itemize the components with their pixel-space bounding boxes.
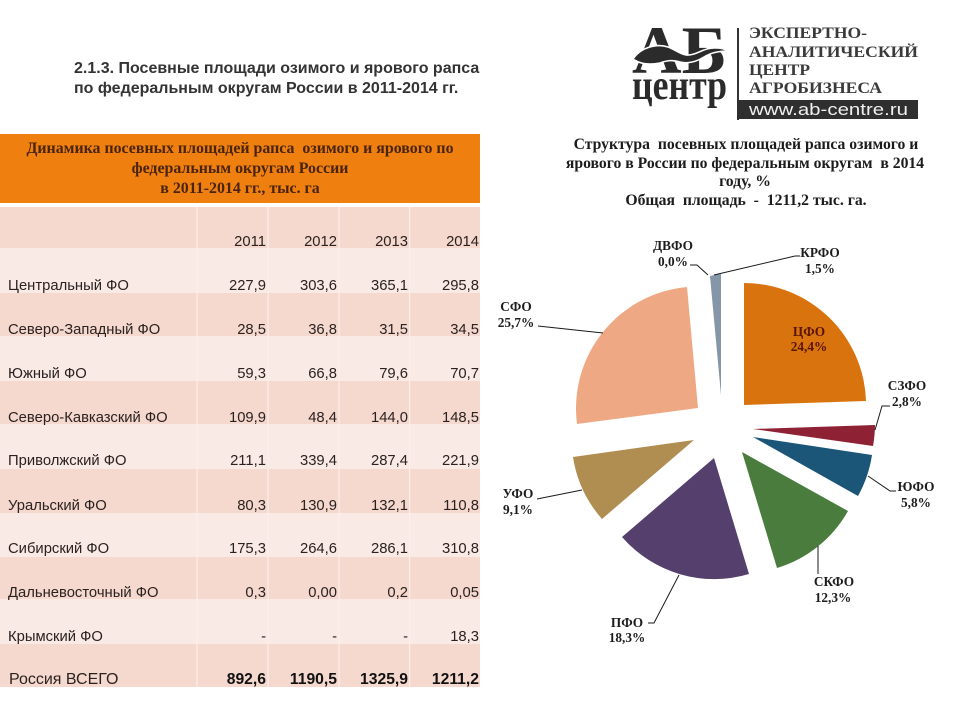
label: СЗФО: СЗФО [888,378,926,393]
label: ЦФО: 24,4% [791,339,827,354]
row: Приволжский ФО: 211,1 [230,453,266,469]
row: Крымский ФО: - [261,629,266,645]
row: Приволжский ФО: Приволжский ФО [8,453,127,469]
row: Россия ВСЕГО: 1325,9 [360,671,408,688]
label: ДВФО: ДВФО [653,238,693,253]
label: ЮФО [868,476,934,510]
row: Уральский ФО: 80,3 [237,498,266,514]
row: Северо-Кавказский ФО: 48,4 [308,410,337,426]
row: Россия ВСЕГО: 1211,2 [432,671,479,688]
row: Приволжский ФО: 287,4 [371,453,408,469]
chart title: Общая площадь - 1211,2 тыс. га. [625,192,867,209]
row: Северо-Кавказский ФО: 148,5 [442,410,479,426]
pie chart: structure by federal district 2014 [498,238,934,645]
row: Приволжский ФО: 221,9 [442,453,479,469]
row: years: 2013 [375,234,408,250]
table header: orange banner: в 2011-2014 гг., тыс. га [160,180,320,197]
table row backgrounds [0,207,480,687]
row: Сибирский ФО: 175,3 [229,541,266,557]
row: Приволжский ФО: 339,4 [300,453,337,469]
row: Центральный ФО: Центральный ФО [8,278,129,294]
slice: ПФО 18,3% [622,458,749,579]
table header: orange banner [0,134,480,203]
row: Северо-Кавказский ФО: Северо-Кавказский ФО [8,410,168,426]
table header: orange banner: Динамика посевных площадей рапса озимого и ярового по [26,140,454,157]
label: КРФО [714,245,840,276]
slice: ЦФО 24,4% [744,283,866,405]
row: Южный ФО: 59,3 [237,366,266,382]
row: Южный ФО [8,366,479,382]
label: СКФО: 12,3% [815,590,851,605]
row: Крымский ФО: 18,3 [450,629,479,645]
row: Южный ФО: 66,8 [308,366,337,382]
chart title: году, % [719,173,771,190]
row: Северо-Западный ФО: 28,5 [237,322,266,338]
table: sown areas 2011-2014 [0,207,480,688]
row: Дальневосточный ФО: 0,2 [387,585,408,601]
label: СЗФО [875,378,926,430]
row: Центральный ФО: 227,9 [229,278,266,294]
title: 2.1.3. Посевные площади озимого и ярового рапса [74,60,479,77]
chart title [566,136,924,209]
logo text: АГРОБИЗНЕСА [749,80,882,97]
row: Сибирский ФО: 264,6 [300,541,337,557]
table header: orange banner: федеральным округам России [132,160,348,177]
row: Дальневосточный ФО: 0,00 [308,585,337,601]
label: СЗФО: 2,8% [892,394,922,409]
row: Северо-Западный ФО [8,322,479,338]
row: Россия ВСЕГО: 1190,5 [290,671,337,688]
logo text: АНАЛИТИЧЕСКИЙ [749,42,919,61]
row: Северо-Кавказский ФО [8,410,479,426]
slice: СФО 25,7% [576,287,698,424]
row: Уральский ФО: 130,9 [300,498,337,514]
label: ПФО: ПФО [611,615,643,630]
row: Крымский ФО: Крымский ФО [8,629,103,645]
row: Центральный ФО: 365,1 [371,278,408,294]
row: Северо-Западный ФО: 36,8 [308,322,337,338]
row: Россия ВСЕГО: 892,6 [227,671,266,688]
label: СФО: СФО [500,299,532,314]
logo url bar: www.ab-centre.ru [748,100,908,119]
label: СКФО [814,546,854,605]
row: Дальневосточный ФО: 0,3 [245,585,266,601]
row: Крымский ФО: - [332,629,337,645]
row: Крымский ФО: - [403,629,408,645]
row: Центральный ФО [8,278,479,294]
logo: AB centre [632,12,919,120]
chart title: ярового в России по федеральным округам в 2014 [566,155,924,172]
row: Сибирский ФО: 286,1 [371,541,408,557]
row: Уральский ФО: 110,8 [443,498,479,514]
row: Дальневосточный ФО: 0,05 [450,585,479,601]
logo text: ЦЕНТР [749,62,810,79]
row: Сибирский ФО [8,541,479,557]
row: Южный ФО: 70,7 [450,366,479,382]
row: Дальневосточный ФО: Дальневосточный ФО [8,585,158,601]
row: Крымский ФО [8,629,479,645]
row: Северо-Западный ФО: Северо-Западный ФО [8,322,160,338]
label: ПФО: 18,3% [609,630,645,645]
slice: ЮФО 5,8% [753,437,872,496]
row: Уральский ФО: 132,1 [371,498,408,514]
row: Приволжский ФО [8,453,479,469]
row: Россия ВСЕГО [9,671,479,688]
label: КРФО: КРФО [800,245,840,260]
row: Сибирский ФО: Сибирский ФО [8,541,109,557]
row: years: 2014 [446,234,479,250]
row: Дальневосточный ФО [8,585,479,601]
label: УФО: 9,1% [503,502,533,517]
row: Северо-Кавказский ФО: 109,9 [229,410,266,426]
label: ПФО [609,575,679,645]
logo mark: АБ with leaf: АБ [632,12,727,88]
row: Северо-Западный ФО: 31,5 [379,322,408,338]
label: СКФО: СКФО [814,574,854,589]
chart title: Структура посевных площадей рапса озимого и [574,136,918,153]
row: Южный ФО: 79,6 [379,366,408,382]
row: Центральный ФО: 295,8 [442,278,479,294]
label: ЦФО [791,324,827,354]
row: Южный ФО: Южный ФО [8,366,87,382]
row: Сибирский ФО: 310,8 [442,541,479,557]
title: по федеральным округам России в 2011-2014 гг. [74,80,458,97]
row: years [234,234,479,250]
label: ДВФО [653,238,708,275]
label: СФО: 25,7% [498,315,534,330]
row: Уральский ФО: Уральский ФО [8,498,107,514]
logo mark: АБ with leaf: центр [632,63,727,109]
label: УФО [503,486,582,517]
row: Центральный ФО: 303,6 [300,278,337,294]
logo divider [737,28,739,120]
label: СФО [498,299,603,333]
slice: СЗФО 2,8% [753,425,875,446]
row: Уральский ФО [8,498,479,514]
row: years: 2011 [234,234,266,250]
row: years: 2012 [304,234,337,250]
slice: УФО 9,1% [573,440,694,519]
title [74,60,479,97]
slice: КРФО 1,5% [710,274,721,395]
label: ЮФО: 5,8% [901,495,931,510]
row: Северо-Западный ФО: 34,5 [450,322,479,338]
label: ЦФО: ЦФО [793,324,825,339]
slice: СКФО 12,3% [742,452,848,568]
logo text [749,25,919,97]
logo text: ЭКСПЕРТНО- [749,25,867,42]
label: КРФО: 1,5% [805,261,835,276]
label: УФО: УФО [503,486,533,501]
row: Россия ВСЕГО: Россия ВСЕГО [9,671,118,688]
row: Северо-Кавказский ФО: 144,0 [371,410,408,426]
label: ЮФО: ЮФО [898,479,934,494]
label: ДВФО: 0,0% [658,254,688,269]
